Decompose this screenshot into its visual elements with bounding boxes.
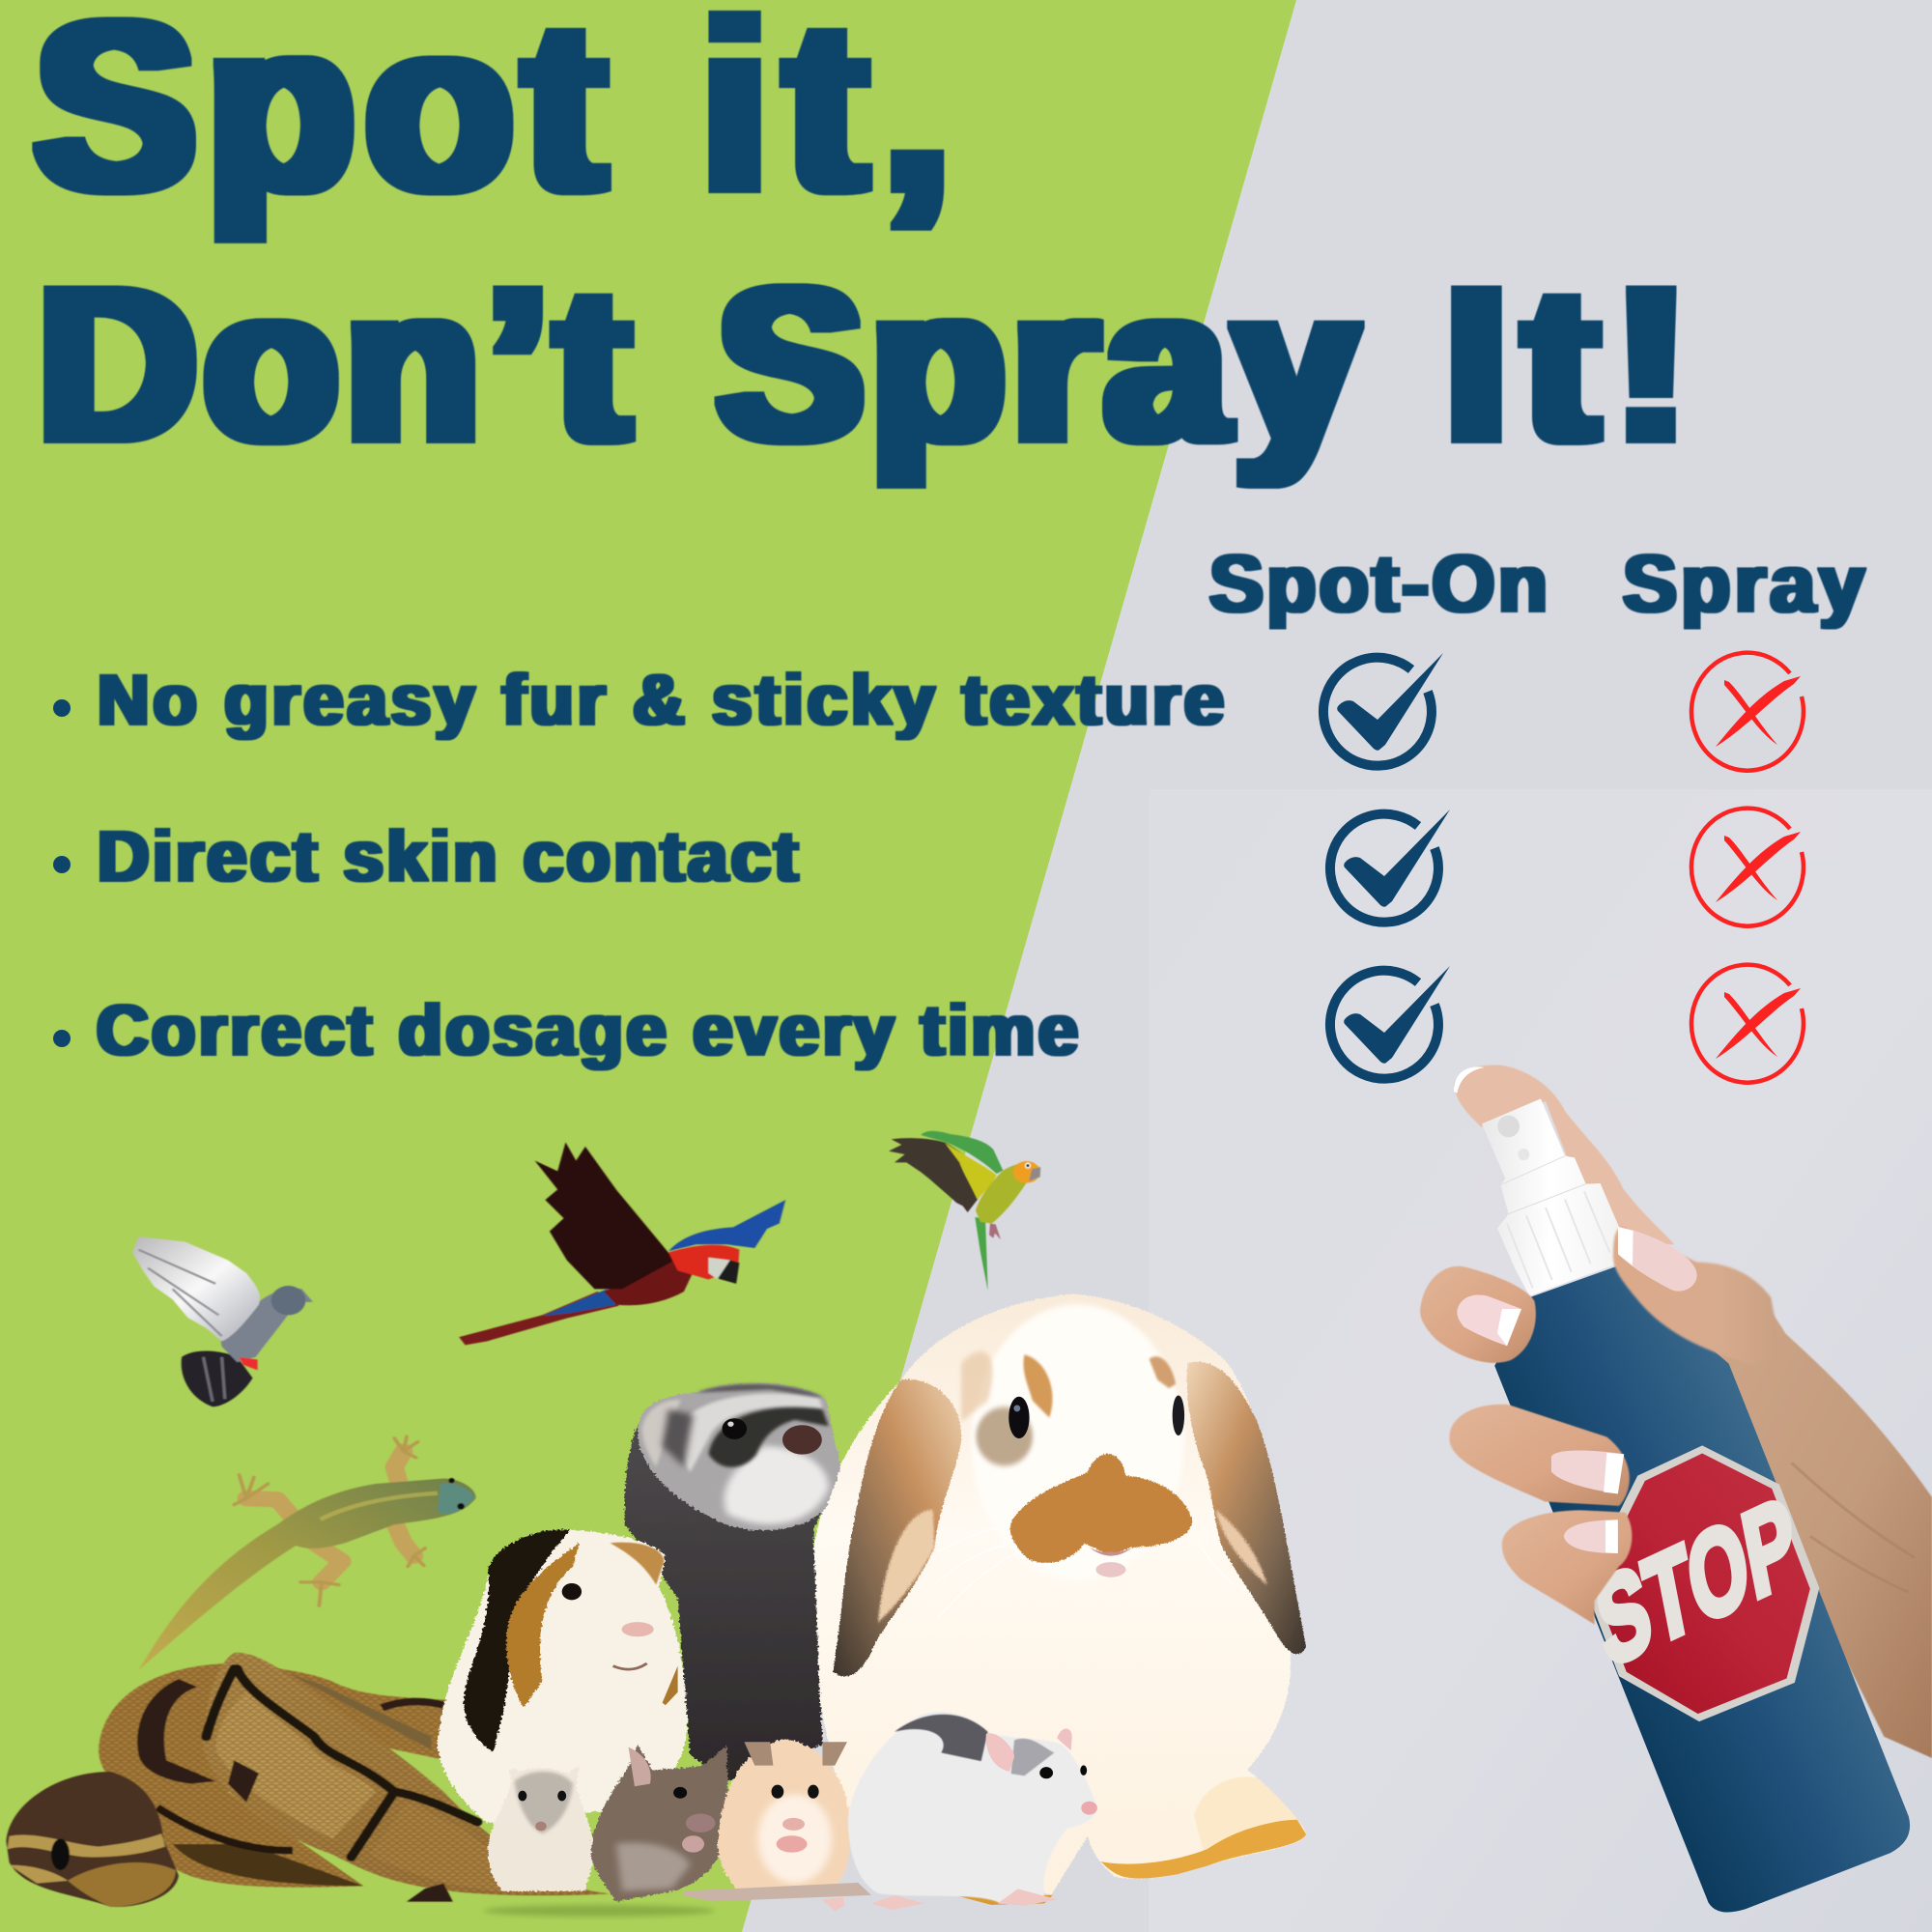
ground shadow	[483, 1905, 715, 1917]
spray cap	[1482, 1098, 1620, 1296]
spray bottle	[1494, 1266, 1910, 1913]
pigeon	[132, 1236, 313, 1406]
hamster	[718, 1740, 850, 1891]
index finger	[1454, 1065, 1674, 1244]
column headings	[1209, 538, 1864, 629]
rabbit head markings	[961, 1304, 1192, 1581]
rabbit	[811, 1294, 1306, 1905]
rat	[682, 1712, 1097, 1911]
check icons	[1323, 653, 1450, 1079]
column headings: Spray	[1623, 538, 1864, 629]
stop sign border	[1584, 1445, 1819, 1721]
brown mouse	[591, 1745, 728, 1902]
bullet list: Correct dosage every time	[97, 990, 1078, 1070]
gecko	[139, 1436, 476, 1670]
snake back coil	[99, 1663, 446, 1888]
title: Don’t	[39, 242, 629, 486]
ferret	[625, 1383, 841, 1781]
hand: palm	[1662, 1256, 1932, 1758]
stop label: STOP	[1587, 1471, 1806, 1692]
little finger	[1502, 1510, 1632, 1625]
title: It!	[1446, 242, 1688, 486]
rabbit right foot	[1194, 1776, 1306, 1866]
middle finger	[1420, 1266, 1536, 1363]
title	[35, 0, 1688, 486]
cross icons	[1691, 653, 1804, 1083]
bullet list	[53, 660, 1224, 1070]
gerbil	[488, 1766, 594, 1891]
green parrot	[889, 1131, 1040, 1291]
bullet list: No greasy fur & sticky texture	[98, 660, 1224, 740]
macaw	[459, 1143, 785, 1345]
rabbit left ear	[833, 1379, 961, 1676]
title: Spray	[718, 242, 1356, 486]
panel: lighter backdrop	[1149, 789, 1932, 1932]
thumb	[1613, 1227, 1780, 1365]
rabbit whiskers	[934, 1526, 1234, 1619]
ring finger	[1449, 1405, 1630, 1506]
snake head	[6, 1772, 179, 1907]
rabbit right ear	[1186, 1362, 1306, 1654]
column headings: Spot-On	[1209, 538, 1548, 629]
bullet list: Direct skin contact	[98, 816, 798, 896]
guinea pig	[438, 1529, 687, 1823]
stop sign face	[1593, 1453, 1810, 1714]
snake main loop	[203, 1653, 610, 1902]
panel: green diagonal	[0, 0, 1296, 1932]
